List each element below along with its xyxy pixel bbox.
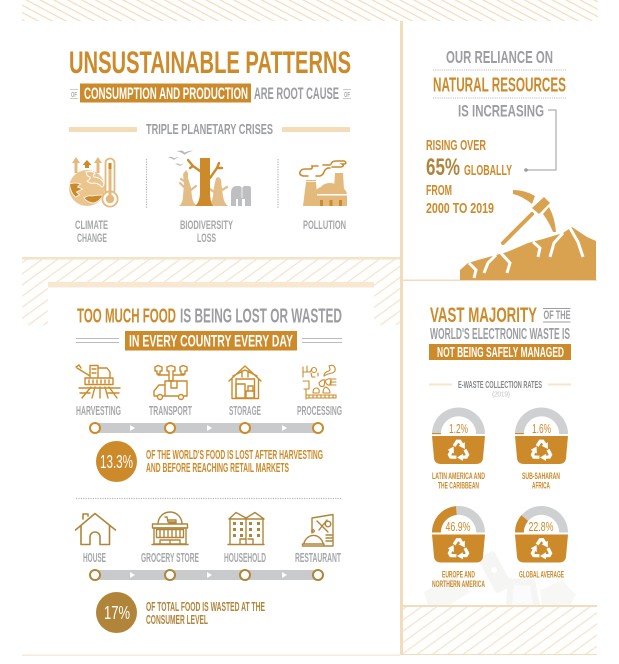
callout: 13.3%: OF THE WORLD'S FOOD IS LOST AFTER HARVESTING — [146, 448, 323, 462]
labels: food chain stages: HARVESTING — [76, 404, 121, 418]
banner: in every country every day: IN EVERY COUNTRY EVERY DAY — [129, 332, 293, 350]
icon: house — [76, 514, 116, 544]
title: UNSUSTAINABLE PATTERNS — [69, 44, 351, 80]
chart: latin america 1.2%: LATIN AMERICA AND — [432, 471, 485, 482]
chart: latin america 1.2% — [432, 408, 485, 492]
chart: global average 22.8%: GLOBAL AVERAGE — [519, 570, 564, 580]
heading: e-waste collection rates — [429, 379, 571, 398]
connector arrow — [524, 110, 556, 172]
icon: processing — [303, 365, 336, 399]
label: climate change — [75, 218, 108, 245]
label: climate change: CHANGE — [77, 231, 107, 245]
timeline: stages — [90, 423, 323, 433]
callout: 13.3%: 13.3% — [100, 452, 133, 472]
chart: europe 46.9% — [432, 506, 485, 590]
food section striped background — [22, 257, 400, 342]
callout: 17%: CONSUMER LEVEL — [146, 613, 208, 627]
labels: food chain stages: STORAGE — [229, 404, 261, 418]
icon: grocery store — [152, 512, 188, 544]
subtitle: OF — [344, 92, 350, 99]
icon: climate change — [69, 157, 118, 207]
chart: latin america 1.2%: THE CARIBBEAN — [438, 480, 479, 492]
chart: europe 46.9%: EUROPE AND — [442, 570, 475, 580]
heading: vast majority: OF THE — [544, 308, 570, 322]
label: biodiversity loss — [180, 218, 233, 245]
callout: 13.3% — [96, 441, 323, 482]
panel: electronic waste — [424, 304, 576, 605]
heading: e-waste collection rates: E-WASTE COLLECTION RATES — [458, 379, 542, 391]
heading: our reliance: IS INCREASING — [458, 102, 544, 120]
labels: consumer stages — [83, 551, 341, 565]
subtitle: ARE ROOT CAUSE — [254, 85, 339, 103]
labels: consumer stages: RESTAURANT — [295, 551, 341, 565]
banner: in every country every day — [76, 331, 342, 350]
rising over stat: RISING OVER — [426, 138, 486, 154]
chart: sub-saharan africa 1.6%: 1.6% — [532, 421, 551, 436]
e-waste section striped footer — [403, 605, 597, 655]
panel: unsustainable patterns — [69, 44, 351, 245]
callout: 17%: 17% — [104, 603, 130, 623]
labels: food chain stages — [76, 404, 342, 418]
chart: sub-saharan africa 1.6% — [515, 408, 568, 492]
labels: food chain stages: TRANSPORT — [149, 404, 192, 418]
labels: food chain stages: PROCESSING — [297, 404, 342, 418]
icon: household — [228, 512, 264, 544]
icon: restaurant — [302, 514, 333, 546]
rising over stat: FROM — [426, 183, 452, 199]
rising over stat: GLOBALLY — [464, 163, 512, 179]
heading: too much food: TOO MUCH FOOD — [77, 306, 176, 328]
chart: global average 22.8%: 22.8% — [528, 519, 554, 534]
icon: transport — [154, 366, 187, 400]
timeline: consumer — [90, 570, 323, 580]
label: biodiversity loss: BIODIVERSITY — [180, 218, 233, 232]
panel: food lost or wasted — [76, 306, 342, 633]
heading: our reliance: OUR RELIANCE ON — [446, 47, 553, 67]
label: pollution: POLLUTION — [303, 218, 346, 232]
rising over stat: 2000 TO 2019 — [426, 201, 494, 217]
icon: harvesting — [76, 365, 120, 398]
rising over stat — [426, 138, 512, 217]
icon: biodiversity loss — [168, 150, 251, 206]
chart: europe 46.9%: NORTHERN AMERICA — [432, 579, 485, 590]
heading: vast majority — [429, 304, 571, 361]
labels: consumer stages: HOUSEHOLD — [224, 551, 266, 565]
top striped band — [22, 0, 598, 21]
icon: storage — [229, 366, 261, 398]
callout: 13.3%: AND BEFORE REACHING RETAIL MARKETS — [146, 461, 289, 475]
icon: pickaxe and mountain — [460, 190, 596, 280]
watermark: e-waste devices — [424, 550, 576, 605]
icon: pollution — [300, 161, 347, 206]
chart: sub-saharan africa 1.6%: SUB-SAHARAN — [522, 471, 560, 482]
subtitle: CONSUMPTION AND PRODUCTION — [84, 85, 248, 103]
chart: global average 22.8% — [515, 506, 568, 580]
heading: e-waste collection rates: (2019) — [492, 392, 510, 398]
heading: too much food — [77, 306, 342, 328]
chart: sub-saharan africa 1.6%: AFRICA — [532, 480, 550, 492]
heading: too much food: IS BEING LOST OR WASTED — [180, 306, 342, 328]
labels: consumer stages: HOUSE — [83, 551, 106, 565]
rising over stat: 65% — [426, 154, 460, 181]
heading: our reliance — [433, 47, 566, 120]
labels: consumer stages: GROCERY STORE — [141, 551, 199, 565]
chart: europe 46.9%: 46.9% — [446, 519, 471, 534]
heading: triple planetary crises: TRIPLE PLANETARY CRISES — [146, 122, 273, 138]
label: climate change: CLIMATE — [75, 218, 108, 232]
heading: vast majority: VAST MAJORITY — [430, 304, 537, 327]
subtitle: OF — [71, 92, 77, 99]
label: biodiversity loss: LOSS — [197, 231, 216, 245]
callout: 17%: OF TOTAL FOOD IS WASTED AT THE — [146, 600, 265, 614]
chart: latin america 1.2%: 1.2% — [449, 421, 468, 436]
callout: 17% — [96, 592, 265, 633]
panel: natural resources — [426, 47, 596, 280]
